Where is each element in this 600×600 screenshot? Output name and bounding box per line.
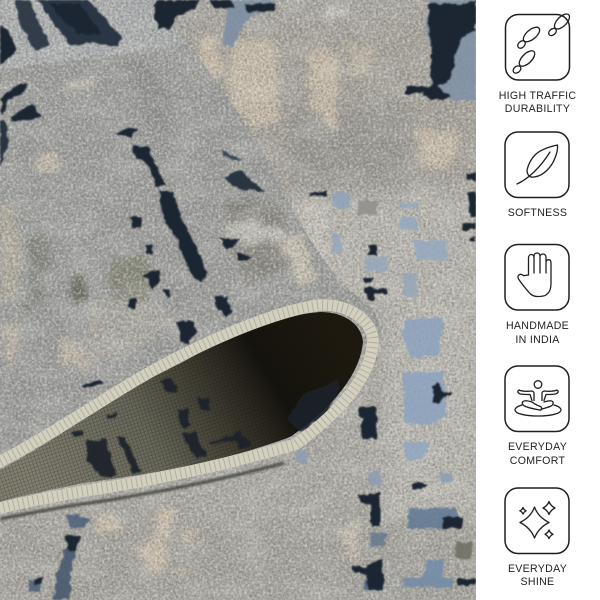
white sidebar background: [476, 0, 600, 600]
panel: rug photo: [0, 0, 476, 600]
icon: feather: [505, 132, 569, 198]
label: everyday comfort: EVERYDAY: [508, 441, 567, 453]
rolled rug streaks: [0, 0, 476, 600]
feature: handmade in india: [505, 244, 569, 346]
flat rug blue marks: [28, 0, 476, 600]
underside of rolled rug: [0, 312, 363, 502]
icon: raised hand: [505, 244, 569, 310]
label: everyday shine: EVERYDAY: [508, 563, 567, 575]
feature: softness: [505, 132, 569, 219]
feature: everyday comfort: [505, 366, 569, 467]
rolled rug top folded band: [0, 0, 190, 70]
flat rug base: [0, 0, 476, 600]
feature: high traffic durability: [499, 11, 576, 115]
icon: sparkles: [505, 488, 569, 554]
rolled rug dark marks: [0, 0, 266, 389]
rug cast shadow: [0, 463, 284, 519]
rolled rug top surface: [0, 0, 381, 470]
rug edge twist texture: [0, 305, 373, 509]
icon: footprints: [506, 11, 572, 80]
label line two: COMFORT: [510, 455, 565, 467]
flat rug dark marks: [34, 0, 476, 590]
label: softness: SOFTNESS: [508, 207, 567, 219]
underside dark marks: [73, 378, 340, 478]
rolled rug tonal patches: [0, 60, 318, 370]
label line two: SHINE: [521, 576, 554, 588]
label: handmade in india: HANDMADE: [506, 320, 569, 332]
panel: feature icons column: [476, 0, 600, 600]
feature: everyday shine: [505, 488, 569, 588]
rug pile dark grain: [0, 0, 476, 600]
rug edge binding: [0, 305, 373, 509]
underside weave: [0, 312, 363, 502]
label: high traffic durability: HIGH TRAFFIC: [499, 90, 576, 102]
rolled rug shading: [0, 0, 318, 371]
flat rug beige patches: [93, 7, 461, 576]
rug mottled highlights: [0, 0, 476, 600]
rug pile light grain: [0, 0, 476, 600]
flat rug tonal zones: [270, 90, 475, 516]
icon: meditating figure: [505, 366, 569, 432]
label line two: DURABILITY: [505, 103, 570, 115]
label line two: IN INDIA: [515, 334, 560, 346]
